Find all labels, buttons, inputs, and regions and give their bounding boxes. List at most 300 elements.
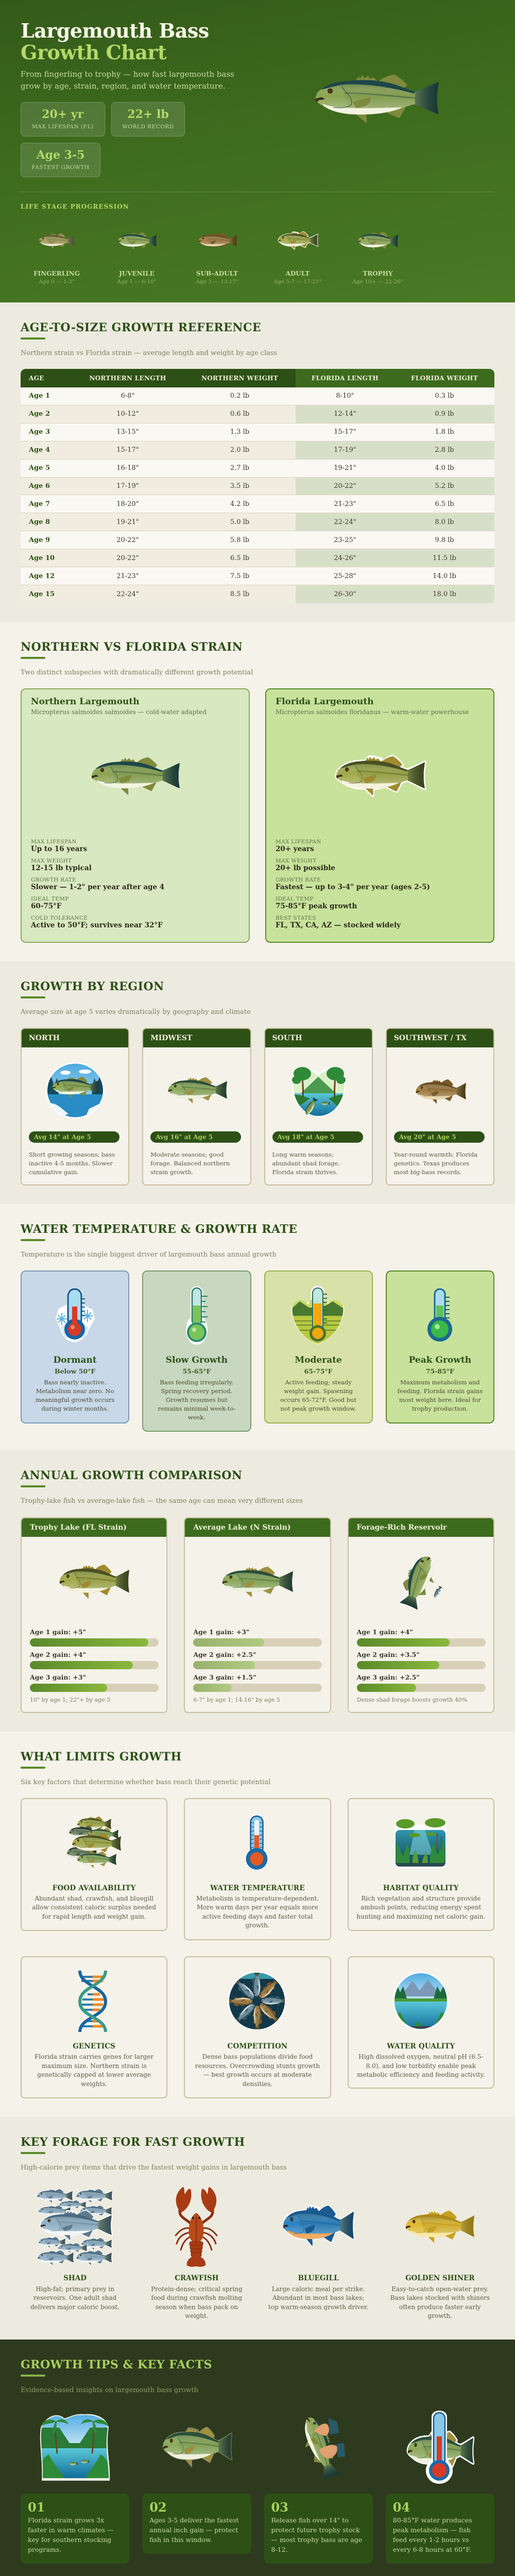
region description: Florida strain thrives.: [272, 1168, 338, 1176]
region description: Moderate seasons; good: [150, 1151, 224, 1158]
region header: SOUTH: [272, 1034, 302, 1042]
tip card 01: 01: [28, 2500, 45, 2514]
description: most weight here. Ideal for: [399, 1396, 481, 1403]
forage text: [264, 2285, 373, 2312]
factor text: [185, 2053, 330, 2089]
size badge: [150, 1131, 241, 1143]
stage: adult: [273, 231, 322, 285]
stat: growth rate: [276, 877, 430, 891]
growth table: Age 7: [29, 500, 50, 508]
growth table: Age 12: [29, 572, 55, 580]
growth table: 25-28": [334, 572, 356, 580]
card header: Trophy Lake (FL Strain): [30, 1523, 127, 1531]
growth table: 19-21": [116, 518, 139, 526]
factor text: allow consistent caloric surplus needed: [32, 1904, 156, 1911]
bar label: Age 2 gain: +2.5": [193, 1651, 256, 1658]
stat: lifespan: MAX LIFESPAN: [31, 839, 77, 845]
icon: hands holding bass: [289, 2417, 350, 2480]
heading: ANNUAL GROWTH COMPARISON: [21, 1469, 243, 1482]
description: [280, 1379, 356, 1412]
description: meaningful growth occurs: [36, 1396, 114, 1403]
bar label: Age 1 gain: +5": [30, 1628, 86, 1636]
bar 1: [357, 1638, 486, 1647]
stage: trophy: TROPHY: [363, 270, 393, 277]
region header: [22, 1029, 128, 1047]
tip card 03: [264, 2494, 373, 2564]
growth table: Age 9: [29, 536, 50, 544]
section: growth tips: [0, 2340, 515, 2576]
factor text: [349, 2053, 493, 2079]
panel: competition: [184, 1956, 331, 2098]
bar 1: [193, 1638, 322, 1647]
stage: sub-adult: Age 3 — 13-17": [196, 279, 238, 285]
forage text: season when bass pack on: [156, 2303, 238, 2311]
icon: midwest bass: [168, 1077, 227, 1104]
description: Spring recovery period.: [161, 1387, 232, 1394]
description: trophy production.: [412, 1404, 468, 1412]
temperature range: 65-75°F: [304, 1367, 333, 1375]
growth table: 22-24": [334, 518, 356, 526]
growth table: 2.7 lb: [230, 464, 249, 472]
growth table: 0.2 lb: [230, 392, 249, 400]
panel: habitat quality: [348, 1798, 494, 1931]
stat: lifespan: Up to 16 years: [31, 845, 87, 853]
panel: north: [21, 1028, 129, 1185]
bar 2: [30, 1661, 159, 1669]
factor text: genetically capped at lower average: [37, 2071, 151, 2078]
heading: KEY FORAGE FOR FAST GROWTH: [21, 2136, 245, 2149]
icon: thermometer: [245, 1815, 269, 1871]
stat: growth rate: Slower — 1-2" per year after age 4: [31, 883, 164, 891]
card header: [185, 1518, 330, 1536]
growth table: Age 15: [29, 590, 55, 598]
icon: average bass: [222, 1567, 293, 1597]
stat: best states: BEST STATES: [276, 915, 316, 921]
bar label: Age 3 gain: +3": [30, 1673, 86, 1681]
subheading: Trophy-lake fish vs average-lake fish — the same age can mean very different sizes: [21, 1497, 303, 1505]
stage: fingerling: Age 0 — 1-3": [39, 279, 75, 285]
forage text: Large caloric meal per strike.: [272, 2285, 365, 2293]
card header: Forage-Rich Reservoir: [357, 1523, 447, 1531]
stat: weight: 20+ lb possible: [276, 864, 335, 872]
bar 3: [357, 1684, 486, 1692]
bar chart: trophy lake gains: [30, 1628, 159, 1692]
growth table: 5.2 lb: [435, 482, 454, 490]
description: week.: [188, 1414, 205, 1421]
icon: green thermometer: [186, 1286, 208, 1345]
description: Bass nearly inactive.: [44, 1379, 106, 1386]
tip card 01: Florida strain grows 3x: [28, 2516, 104, 2524]
strain title: Florida Largemouth: [276, 697, 374, 707]
growth table: 18-20": [116, 500, 139, 508]
heading: NORTHERN VS FLORIDA STRAIN: [21, 640, 243, 654]
icon: school of bass: [66, 1817, 121, 1868]
stat: max lifespan: MAX LIFESPAN (FL): [32, 124, 94, 130]
icon: shad school: [37, 2188, 113, 2266]
stage: trophy: Age 10+ — 22-26": [352, 279, 403, 285]
bar chart: average lake gains: [193, 1628, 322, 1692]
region description: Short growing seasons; bass: [29, 1151, 115, 1158]
icon: northern bass: [92, 757, 180, 795]
description: occurs 65-72°F. Good but: [280, 1396, 356, 1403]
region description: [150, 1151, 230, 1176]
stat: world record: WORLD RECORD: [122, 124, 174, 130]
stage: fingerling: [33, 233, 80, 285]
stat: lifespan: MAX LIFESPAN: [276, 839, 321, 845]
growth table: 6-8": [121, 392, 134, 400]
tip card 02: Ages 3-5 deliver the fastest: [149, 2516, 239, 2524]
description: [398, 1379, 483, 1412]
growth table: 7.5 lb: [230, 572, 249, 580]
size badge: Avg 18" at Age 5: [277, 1133, 334, 1141]
temperature name: Moderate: [295, 1355, 342, 1365]
panel: midwest: [142, 1028, 251, 1185]
bar label: Age 1 gain: +3": [193, 1628, 249, 1636]
bar 2: [193, 1661, 322, 1669]
forage text: [386, 2285, 494, 2320]
stat: max lifespan: [21, 102, 105, 137]
factor text: — best growth occurs at moderate: [203, 2071, 312, 2078]
heading: GROWTH BY REGION: [21, 980, 164, 993]
growth table: 0.3 lb: [435, 392, 454, 400]
factor text: More warm days per year equals more: [197, 1904, 318, 1911]
stat: fastest growth: FASTEST GROWTH: [31, 164, 90, 171]
tip card 04: every 6-8 hours at 60°F.: [393, 2546, 471, 2553]
growth table: 12-14": [334, 410, 356, 418]
stage: juvenile: [117, 232, 157, 285]
factor text: [22, 1894, 166, 1921]
region header: NORTH: [29, 1034, 60, 1042]
growth table: AGE: [29, 375, 44, 382]
section: growth by region: [21, 981, 494, 1185]
subheading: Northern strain vs Florida strain — average length and weight by age class: [21, 349, 277, 357]
stat: weight: [31, 858, 92, 872]
note: 10" by age 1; 22"+ by age 5: [30, 1696, 110, 1703]
stage: fingerling: FINGERLING: [33, 270, 80, 277]
region description: [272, 1151, 340, 1176]
region description: strain growth.: [150, 1168, 193, 1176]
growth table: 2.0 lb: [230, 446, 249, 454]
description: not peak growth window.: [281, 1404, 356, 1412]
stat: cold tolerance: COLD TOLERANCE: [31, 915, 88, 921]
forage text: often produce faster early: [399, 2303, 481, 2311]
panel: trophy lake: [21, 1517, 167, 1713]
icon: clean lake: [393, 1972, 449, 2030]
factor text: [22, 2053, 166, 2089]
icon: ages 3-5 bass: [163, 2428, 232, 2467]
forage text: High-fat; primary prey in: [36, 2285, 114, 2293]
bar chart: reservoir gains: [356, 1628, 486, 1692]
stat: lifespan: [276, 839, 321, 853]
growth table: 21-23": [116, 572, 139, 580]
growth table: 15-17": [116, 446, 139, 454]
forage text: reservoirs. One adult shad: [33, 2294, 116, 2301]
tip card 02: fish in this window.: [149, 2536, 212, 2544]
icon: dna helix: [77, 1970, 108, 2033]
forage text: Protein-dense; critical spring: [151, 2285, 243, 2293]
bar label: Age 3 gain: +2.5": [357, 1673, 420, 1681]
region description: [29, 1151, 115, 1176]
tip card 02: [142, 2494, 251, 2554]
growth table: 10-12": [116, 410, 139, 418]
factor text: maximum size. Northern strain is: [42, 2062, 147, 2069]
factor text: Rich vegetation and structure provide: [361, 1895, 480, 1902]
growth table: Age 6: [29, 482, 50, 490]
size badge: [29, 1131, 119, 1143]
card header: [22, 1518, 166, 1536]
size badge: Avg 14" at Age 5: [34, 1133, 91, 1141]
forage text: top warm-season growth driver.: [268, 2303, 368, 2311]
subheading: Two distinct subspecies with dramatically different growth potential: [21, 669, 253, 676]
stage: adult: Age 5-7 — 17-21": [273, 279, 322, 285]
icon: crawfish: [174, 2187, 219, 2267]
temperature name: Slow Growth: [166, 1355, 228, 1365]
growth table: FLORIDA WEIGHT: [411, 375, 478, 382]
description: during winter months.: [41, 1404, 109, 1412]
growth table: Age 1: [29, 392, 50, 400]
tip card 03: 03: [271, 2500, 288, 2514]
temperature range: Below 50°F: [55, 1367, 95, 1375]
icon: texas bass: [416, 1079, 466, 1104]
forage text: food during crawfish molting: [151, 2294, 242, 2301]
factor text: 8.0), and low turbidity enable peak: [366, 2062, 476, 2069]
stat: ideal temp: [31, 896, 69, 910]
description: weight gain. Spawning: [284, 1387, 353, 1394]
factor title: HABITAT QUALITY: [383, 1884, 459, 1892]
stage: adult: ADULT: [286, 270, 310, 277]
section: what limits growth: [0, 1732, 515, 2117]
icon: peak thermometer: [427, 1288, 452, 1342]
section: key forage: [0, 2117, 515, 2340]
stat: cold tolerance: Active to 50°F; survives near 32°F: [31, 921, 163, 929]
description: Metabolism near zero. No: [36, 1387, 114, 1394]
stat: world record: 22+ lb: [127, 108, 169, 121]
forage item: crawfish: [142, 2184, 251, 2328]
growth table: 20-22": [116, 554, 139, 562]
icon: tropical lake: [40, 2414, 110, 2481]
stat: growth rate: Fastest — up to 3-4" per year (ages 2-5): [276, 883, 430, 891]
growth table: 0.9 lb: [435, 410, 454, 418]
factor text: Dense bass populations divide food: [202, 2053, 313, 2060]
factor text: hunting and maximizing net caloric gain.: [356, 1913, 485, 1920]
factor text: ambush points, reducing energy spent: [360, 1904, 481, 1911]
growth table: 8.5 lb: [230, 590, 249, 598]
panel: water quality: [348, 1956, 494, 2089]
growth table: 15-17": [334, 428, 356, 436]
growth table: 6.5 lb: [230, 554, 249, 562]
tip card 03: protect future trophy stock: [271, 2526, 360, 2534]
stat: weight: 12-15 lb typical: [31, 864, 92, 872]
stat: cold tolerance: [31, 915, 163, 929]
stat: ideal temp: IDEAL TEMP: [31, 896, 69, 902]
stat: ideal temp: 60-75°F: [31, 902, 62, 910]
temperature name: Peak Growth: [409, 1355, 471, 1365]
subheading: Temperature is the single biggest driver of largemouth bass annual growth: [21, 1251, 277, 1259]
growth table: 17-19": [116, 482, 139, 490]
growth table: 14.0 lb: [433, 572, 456, 580]
growth table: 13-15": [116, 428, 139, 436]
growth table: 1.8 lb: [435, 428, 454, 436]
tip card 04: [386, 2494, 494, 2564]
tip card 03: Release fish over 14" to: [271, 2516, 349, 2524]
description: Bass feeding irregularly.: [160, 1379, 233, 1386]
subheading: High-calorie prey items that drive the fastest weight gains in largemouth bass: [21, 2164, 287, 2172]
icon: hero bass: [315, 75, 439, 123]
factor title: WATER TEMPERATURE: [210, 1884, 305, 1892]
icon: florida bass: [335, 755, 426, 797]
stat: fastest growth: Age 3-5: [37, 148, 84, 162]
forage name: SHAD: [63, 2274, 87, 2282]
growth table: 22-24": [116, 590, 139, 598]
description: [158, 1379, 235, 1421]
subheading: Six key factors that determine whether bass reach their genetic potential: [21, 1778, 270, 1786]
factor text: resources. Overcrowding stunts growth: [195, 2062, 320, 2069]
icon: aquatic habitat: [394, 1818, 447, 1868]
tip card 01: [21, 2494, 129, 2564]
bar label: Age 1 gain: +4": [357, 1628, 413, 1636]
factor text: Abundant shad, crawfish, and bluegill: [35, 1895, 153, 1902]
tip card 02: 02: [149, 2500, 167, 2514]
region description: genetics. Texas produces: [394, 1159, 469, 1166]
panel: food availability: [21, 1798, 167, 1931]
temperature range: 55-65°F: [182, 1367, 211, 1375]
tip card 03: — most trophy bass are age: [271, 2536, 362, 2544]
factor text: growth.: [245, 1922, 270, 1929]
stat: fastest growth: [21, 143, 100, 177]
region header: MIDWEST: [150, 1034, 192, 1042]
forage text: Bass lakes stocked with shiners: [390, 2294, 490, 2301]
factor text: High dissolved oxygen, neutral pH (6.5-: [358, 2053, 484, 2060]
stat: growth rate: [31, 877, 164, 891]
factor text: for rapid length and weight gain.: [42, 1913, 146, 1920]
growth table: 19-21": [334, 464, 356, 472]
title: [21, 19, 209, 64]
icon: frozen thermometer: [56, 1288, 95, 1342]
growth table: Age 4: [29, 446, 50, 454]
title: Growth Chart: [21, 41, 166, 64]
forage name: GOLDEN SHINER: [405, 2274, 475, 2282]
panel: average lake: [184, 1517, 331, 1713]
growth table: 11.5 lb: [433, 554, 456, 562]
stat: ideal temp: IDEAL TEMP: [276, 896, 314, 902]
size badge: Avg 20" at Age 5: [399, 1133, 456, 1141]
forage item: shad: [21, 2184, 129, 2328]
stage: sub-adult: [196, 233, 238, 285]
latin name: Micropterus salmoides salmoides — cold-water adapted: [31, 708, 207, 716]
panel: water temperature: [184, 1798, 331, 1940]
hero subtitle: [21, 70, 234, 91]
panel: forage-rich reservoir: [348, 1517, 494, 1713]
description: [36, 1379, 114, 1412]
tip card 01: key for southern stocking: [28, 2536, 111, 2544]
growth table: 18.0 lb: [433, 590, 456, 598]
growth table: [21, 369, 494, 603]
growth table: FLORIDA LENGTH: [312, 375, 379, 382]
description: remains minimal week-to-: [158, 1404, 235, 1412]
tip card 02: annual inch gain — protect: [149, 2526, 238, 2534]
stat: ideal temp: [276, 896, 357, 910]
icon: bluegill: [283, 2206, 354, 2247]
growth table: 2.8 lb: [435, 446, 454, 454]
description: Growth resumes but: [166, 1396, 228, 1403]
region description: abundant shad forage.: [272, 1159, 340, 1166]
icon: northern lake scene: [46, 1062, 105, 1118]
stage: trophy: [352, 232, 403, 285]
stat: weight: MAX WEIGHT: [276, 858, 316, 864]
growth table: 6.5 lb: [435, 500, 454, 508]
stat: weight: [276, 858, 335, 872]
stat: growth rate: GROWTH RATE: [276, 877, 321, 883]
tip card 01: faster in warm climates —: [28, 2526, 113, 2534]
temperature name: Dormant: [53, 1355, 97, 1365]
forage text: delivers major caloric boost.: [30, 2303, 119, 2311]
factor text: Metabolism is temperature-dependent.: [196, 1895, 319, 1902]
region description: Year-round warmth; Florida: [394, 1151, 477, 1158]
hero subtitle: grow by age, strain, region, and water temperature.: [21, 81, 226, 91]
panel: moderate: [264, 1270, 373, 1423]
panel: dormant: [21, 1270, 129, 1423]
panel: florida strain: [265, 688, 494, 943]
icon: southern lake scene: [292, 1067, 346, 1117]
growth table: 8-10": [336, 392, 354, 400]
growth table: 16-18": [116, 464, 139, 472]
factor text: [185, 1894, 330, 1930]
factor text: weights.: [81, 2080, 107, 2088]
factor text: densities.: [243, 2080, 272, 2088]
growth table: 23-25": [334, 536, 356, 544]
region description: inactive 4-5 months. Slower: [29, 1159, 113, 1166]
bar label: Age 3 gain: +1.5": [193, 1673, 256, 1681]
region description: cumulative gain.: [29, 1168, 79, 1176]
hero subtitle: From fingerling to trophy — how fast largemouth bass: [21, 70, 234, 79]
icon: golden shiner: [405, 2211, 474, 2243]
icon: lake thermometer: [291, 1286, 344, 1344]
section: water temperature: [0, 1204, 515, 1450]
stat: best states: [276, 915, 401, 929]
forage text: [142, 2285, 251, 2320]
growth table: Age 3: [29, 428, 50, 436]
tip card 04: 80-85°F water produces: [393, 2516, 472, 2524]
forage text: Easy-to-catch open-water prey.: [391, 2285, 488, 2293]
card header: Average Lake (N Strain): [193, 1523, 291, 1531]
stage: juvenile: Age 1 — 6-10": [117, 279, 157, 285]
growth table: Age 5: [29, 464, 50, 472]
factor text: active feeding days and faster total: [202, 1913, 313, 1920]
region description: most big-bass records.: [394, 1168, 462, 1176]
stat: lifespan: 20+ years: [276, 845, 314, 853]
factor title: WATER QUALITY: [387, 2042, 455, 2050]
growth table: 20-22": [334, 482, 356, 490]
growth table: 20-22": [116, 536, 139, 544]
factor title: FOOD AVAILABILITY: [53, 1884, 136, 1892]
tip card 04: peak metabolism — fish: [393, 2526, 471, 2534]
region header: [143, 1029, 250, 1047]
life stage heading: LIFE STAGE PROGRESSION: [21, 203, 129, 210]
heading: WATER TEMPERATURE & GROWTH RATE: [21, 1223, 298, 1236]
hero section: [0, 0, 515, 302]
description: Maximum metabolism and: [400, 1379, 480, 1386]
growth table: 26-30": [334, 590, 356, 598]
region description: [393, 1151, 477, 1176]
stat: world record: [111, 102, 185, 137]
region header: [265, 1029, 372, 1047]
region description: forage. Balanced northern: [150, 1159, 230, 1166]
region header: SOUTHWEST / TX: [394, 1034, 467, 1042]
forage item: bluegill: [264, 2184, 373, 2328]
note: Dense shad forage boosts growth 40%: [357, 1696, 467, 1703]
forage item: golden shiner: [386, 2184, 494, 2328]
factor title: COMPETITION: [228, 2042, 287, 2050]
